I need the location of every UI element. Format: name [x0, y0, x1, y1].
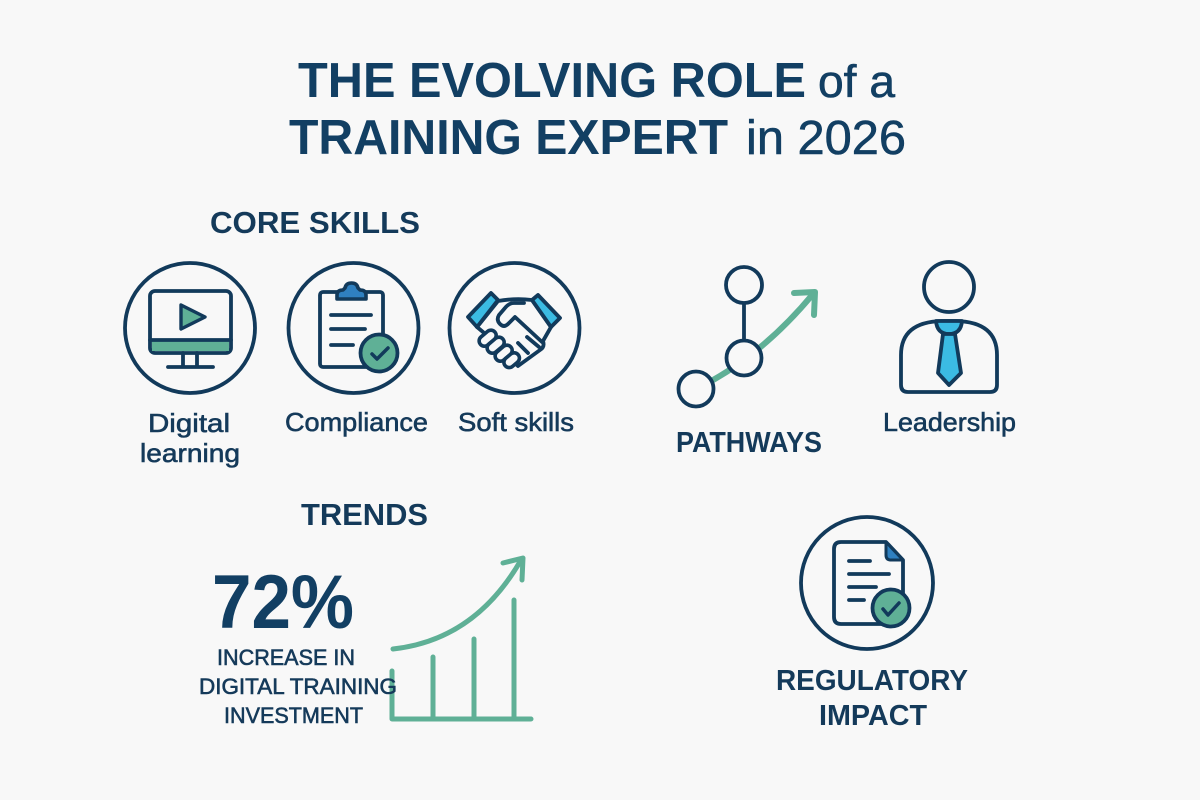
title [289, 54, 906, 165]
icon: leadership person with tie [901, 262, 997, 392]
label: compliance: Compliance [285, 407, 428, 437]
icon: pathways nodes and arrow [678, 267, 815, 406]
stat description: DIGITAL TRAINING [199, 674, 397, 699]
label: digital learning: Digital [148, 408, 230, 438]
label: soft skills: Soft skills [458, 407, 574, 437]
chart: rising bars and trend arrow [392, 558, 531, 719]
label: regulatory impact [776, 665, 968, 732]
icon: compliance clipboard [288, 263, 418, 393]
label: regulatory impact: IMPACT [819, 700, 927, 732]
label: pathways: PATHWAYS [676, 427, 822, 459]
stat description: INVESTMENT [224, 703, 363, 728]
heading: core skills: CORE SKILLS [210, 205, 420, 240]
title: in 2026 [746, 112, 906, 165]
label: regulatory impact: REGULATORY [776, 665, 968, 697]
icon: soft skills handshake [450, 263, 580, 393]
title: of a [818, 56, 896, 107]
label: leadership: Leadership [883, 407, 1016, 437]
title: TRAINING EXPERT [289, 111, 728, 165]
stat description [199, 645, 397, 728]
stat: 72 percent: 72% [212, 560, 354, 645]
icon: digital learning [125, 263, 255, 393]
heading: trends: TRENDS [301, 497, 428, 532]
label: digital learning [140, 408, 240, 468]
stat description: INCREASE IN [217, 645, 355, 670]
label: digital learning: learning [140, 438, 240, 468]
icon: regulatory document [801, 517, 933, 649]
title: THE EVOLVING ROLE [298, 54, 806, 108]
